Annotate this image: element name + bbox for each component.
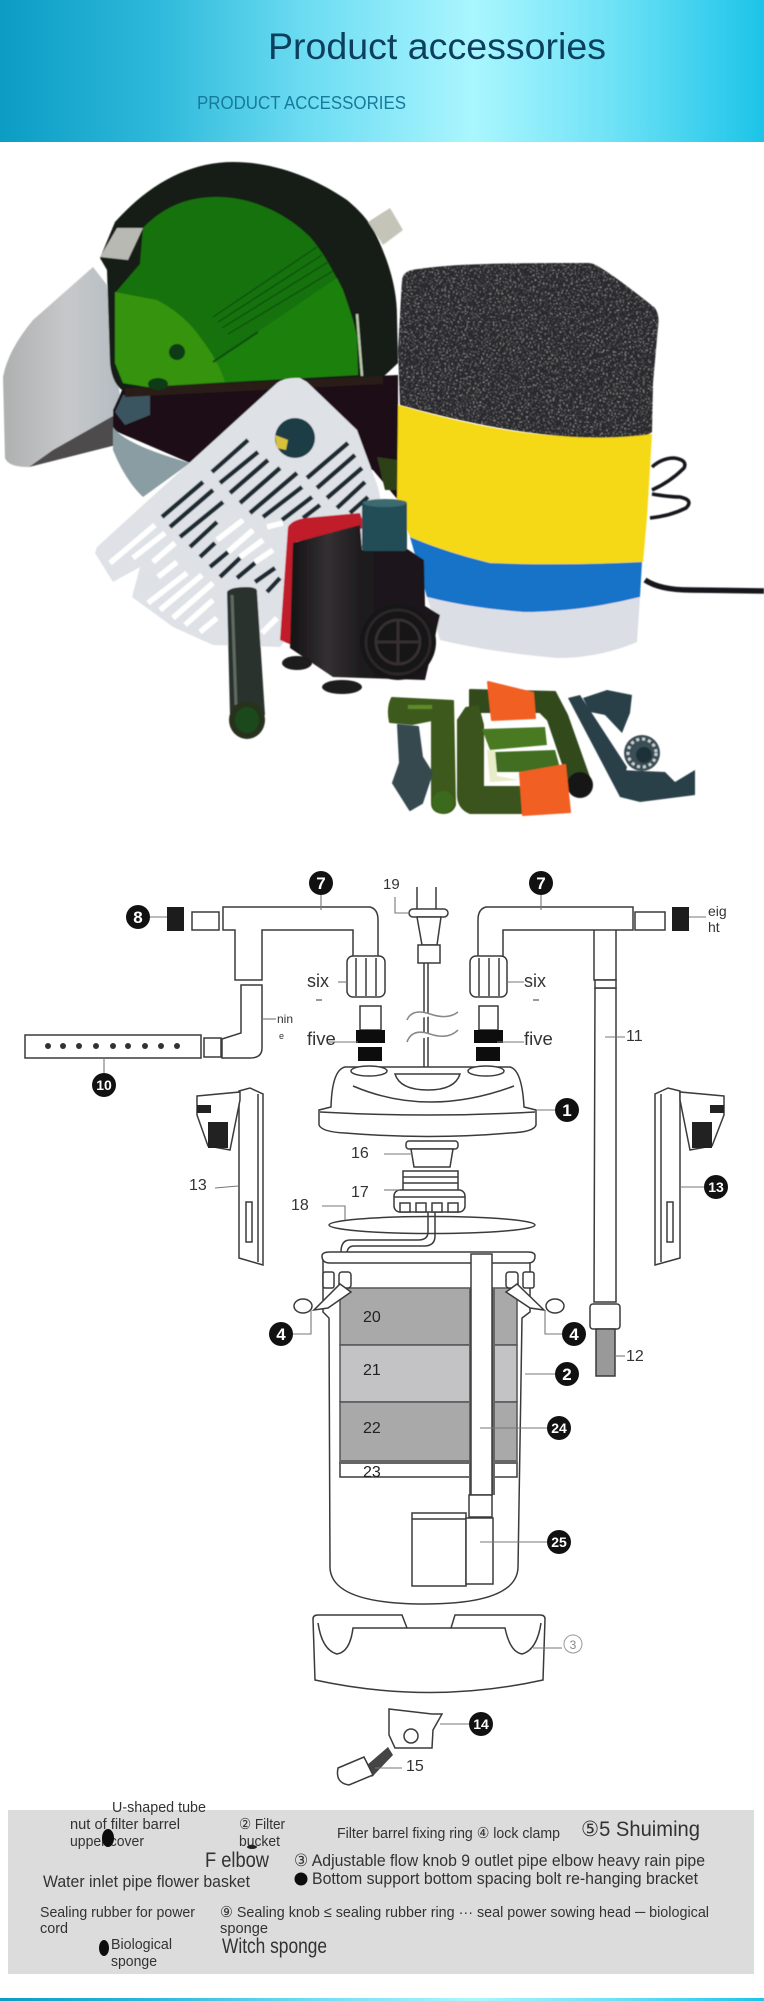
diagram part labels: 17 bbox=[351, 1184, 369, 1201]
inlet spray bar 10 bbox=[25, 985, 262, 1058]
diagram part labels: five bbox=[307, 1028, 336, 1049]
water pump bbox=[280, 499, 440, 694]
callout 1: 1 bbox=[562, 1101, 572, 1120]
metal clip left bbox=[100, 228, 143, 260]
diagram part labels: 12 bbox=[626, 1348, 644, 1365]
diagram part labels: eig bbox=[708, 903, 727, 919]
legend text: Sealing rubber for power bbox=[40, 1904, 195, 1921]
legend text: ② Filter bbox=[239, 1816, 285, 1833]
legend text: ⑨ Sealing knob ≤ sealing rubber ring ··· seal power sowing head ─ biological bbox=[220, 1904, 709, 1921]
left connector bbox=[356, 1006, 385, 1061]
lid holes bbox=[169, 344, 185, 360]
callout 14: 14 bbox=[473, 1716, 489, 1732]
left valve 8 bbox=[167, 907, 219, 931]
header banner bbox=[0, 0, 764, 142]
grey scoop housing bbox=[3, 267, 122, 467]
callout 2 bbox=[555, 1362, 579, 1386]
legend text: sponge bbox=[220, 1920, 268, 1937]
left outlet U-pipe bbox=[223, 907, 378, 980]
plate dark slots bbox=[162, 440, 368, 592]
diagram part labels bbox=[189, 876, 727, 1775]
tube 11 bbox=[594, 980, 616, 1302]
power plug and cord bbox=[407, 887, 458, 1072]
plate white slots bbox=[110, 520, 283, 633]
part 18 sealing ring bbox=[329, 1216, 535, 1234]
callout 13 bbox=[704, 1175, 728, 1199]
lid brown edge bbox=[125, 376, 383, 397]
right outlet U-pipe bbox=[478, 907, 633, 980]
strainer 12 bbox=[590, 1304, 620, 1376]
diagram part labels: 18 bbox=[291, 1197, 309, 1214]
teal canister rim bbox=[113, 427, 190, 497]
part 1 filter lid bbox=[319, 1066, 536, 1136]
internal riser pipe 24 bbox=[469, 1254, 495, 1517]
callout 7 right bbox=[529, 871, 553, 895]
inlet tube bbox=[341, 1212, 435, 1254]
right knob bbox=[470, 956, 507, 997]
hanging bracket 13 right bbox=[655, 1088, 724, 1265]
diagram part labels: six bbox=[524, 971, 546, 991]
light green sector bbox=[115, 292, 225, 387]
callout 25: 25 bbox=[551, 1534, 567, 1550]
yellow foam bbox=[397, 405, 652, 564]
legend text: Witch sponge bbox=[222, 1935, 327, 1958]
part 17 threaded nut bbox=[394, 1171, 465, 1212]
legend text: upper cover bbox=[70, 1833, 144, 1850]
metal clip right bbox=[368, 208, 403, 245]
diagram part labels: 19 bbox=[383, 876, 400, 893]
callout 10 bbox=[92, 1073, 116, 1097]
legend text: U-shaped tube bbox=[112, 1799, 206, 1816]
right connector bbox=[474, 1006, 503, 1061]
diagram part labels: 23 bbox=[363, 1464, 381, 1481]
callout 24 bbox=[547, 1416, 571, 1440]
legend text: sponge bbox=[111, 1953, 157, 1970]
callout 8: 8 bbox=[133, 908, 143, 927]
diagram part labels: 13 bbox=[189, 1177, 207, 1194]
legend text: nut of filter barrel bbox=[70, 1816, 180, 1833]
plate hole bbox=[275, 418, 315, 458]
dark green strip bbox=[377, 457, 398, 490]
leader lines bbox=[104, 895, 706, 1768]
callout 4 left: 4 bbox=[276, 1325, 286, 1344]
callout 7 left: 7 bbox=[316, 874, 326, 893]
callout 24: 24 bbox=[551, 1420, 567, 1436]
pump 25 bbox=[412, 1513, 493, 1586]
legend text: Water inlet pipe flower basket bbox=[43, 1872, 250, 1891]
teal hanging bracket bbox=[568, 690, 695, 802]
canister dark base bbox=[113, 375, 398, 500]
barrel rim bbox=[322, 1252, 535, 1263]
hanging bracket 13 left bbox=[197, 1088, 263, 1265]
diagram part labels: nin bbox=[277, 1012, 293, 1026]
callout 14 bbox=[469, 1712, 493, 1736]
green lid dark shell bbox=[100, 162, 398, 392]
blue foam bbox=[410, 537, 642, 612]
callout 4 left bbox=[269, 1322, 293, 1346]
bolt part 15 bbox=[337, 1747, 393, 1785]
title: Product accessories bbox=[268, 26, 606, 67]
legend text bbox=[40, 1799, 709, 1970]
white reflection strip bbox=[357, 314, 362, 376]
part 16 connector bbox=[406, 1141, 458, 1167]
diagram part labels: 3 bbox=[570, 1638, 577, 1652]
callout 7 right: 7 bbox=[536, 874, 546, 893]
legend text: bucket bbox=[239, 1833, 281, 1850]
filter media layers bbox=[340, 1288, 517, 1477]
clamp part 14 bbox=[389, 1709, 442, 1748]
diagram part labels: 15 bbox=[406, 1758, 424, 1775]
diagram part labels: ht bbox=[708, 919, 720, 935]
diagram part labels: 22 bbox=[363, 1420, 381, 1437]
U-shaped green pipes bbox=[458, 690, 593, 813]
callout 4 right: 4 bbox=[569, 1325, 579, 1344]
callout 7 left bbox=[309, 871, 333, 895]
legend text: ③ Adjustable flow knob 9 outlet pipe elbow heavy rain pipe bbox=[294, 1851, 705, 1870]
callout 13: 13 bbox=[708, 1179, 724, 1195]
white foam bbox=[427, 597, 640, 658]
diagram part labels: e bbox=[279, 1031, 284, 1041]
glass tube bbox=[227, 587, 265, 739]
spray bar holes bbox=[45, 1043, 180, 1049]
callout 10: 10 bbox=[96, 1077, 112, 1093]
orange flow knobs bbox=[488, 682, 570, 815]
black foam sponge bbox=[398, 263, 659, 440]
right valve 8 bbox=[635, 907, 689, 931]
diagram part labels: five bbox=[524, 1028, 553, 1049]
base tray bbox=[313, 1615, 545, 1692]
lid inner green bbox=[115, 197, 358, 387]
subtitle: PRODUCT ACCESSORIES bbox=[197, 93, 406, 113]
legend text: Filter barrel fixing ring ④ lock clamp bbox=[337, 1825, 560, 1842]
lighter green right segment bbox=[213, 278, 358, 382]
callout 4 right bbox=[562, 1322, 586, 1346]
legend text: ⑤5 Shuiming bbox=[581, 1818, 700, 1841]
lock clamp right bbox=[506, 1272, 564, 1313]
legend text: Bottom support bottom spacing bolt re-hanging bracket bbox=[312, 1869, 698, 1888]
diagram part labels: 20 bbox=[363, 1309, 381, 1326]
parts legend panel bbox=[8, 1799, 754, 1974]
scoop shadow wedge bbox=[29, 416, 116, 467]
callout 1 bbox=[555, 1098, 579, 1122]
lock clamp left bbox=[294, 1272, 351, 1313]
callout 25 bbox=[547, 1530, 571, 1554]
diagram part labels: 11 bbox=[626, 1028, 643, 1045]
legend text: F elbow bbox=[205, 1849, 270, 1872]
product photo: filter accessories bbox=[3, 162, 764, 815]
diagram part labels: 16 bbox=[351, 1145, 369, 1162]
legend text: cord bbox=[40, 1920, 68, 1937]
legend text: Biological bbox=[111, 1936, 172, 1953]
power cable bbox=[645, 458, 764, 591]
lid ribs bbox=[213, 247, 333, 362]
diagram part labels: six bbox=[307, 971, 329, 991]
callout 2: 2 bbox=[562, 1365, 572, 1384]
callout 8 bbox=[126, 905, 150, 929]
white grid plate bbox=[95, 378, 385, 647]
elbow pipe with strainer bbox=[389, 698, 455, 813]
bottom band bbox=[0, 1998, 764, 2001]
left knob bbox=[347, 956, 385, 997]
numbered callouts bbox=[92, 871, 728, 1736]
diagram part labels: 21 bbox=[363, 1362, 381, 1379]
exploded parts diagram bbox=[25, 887, 724, 1785]
barrel body bbox=[323, 1261, 530, 1604]
